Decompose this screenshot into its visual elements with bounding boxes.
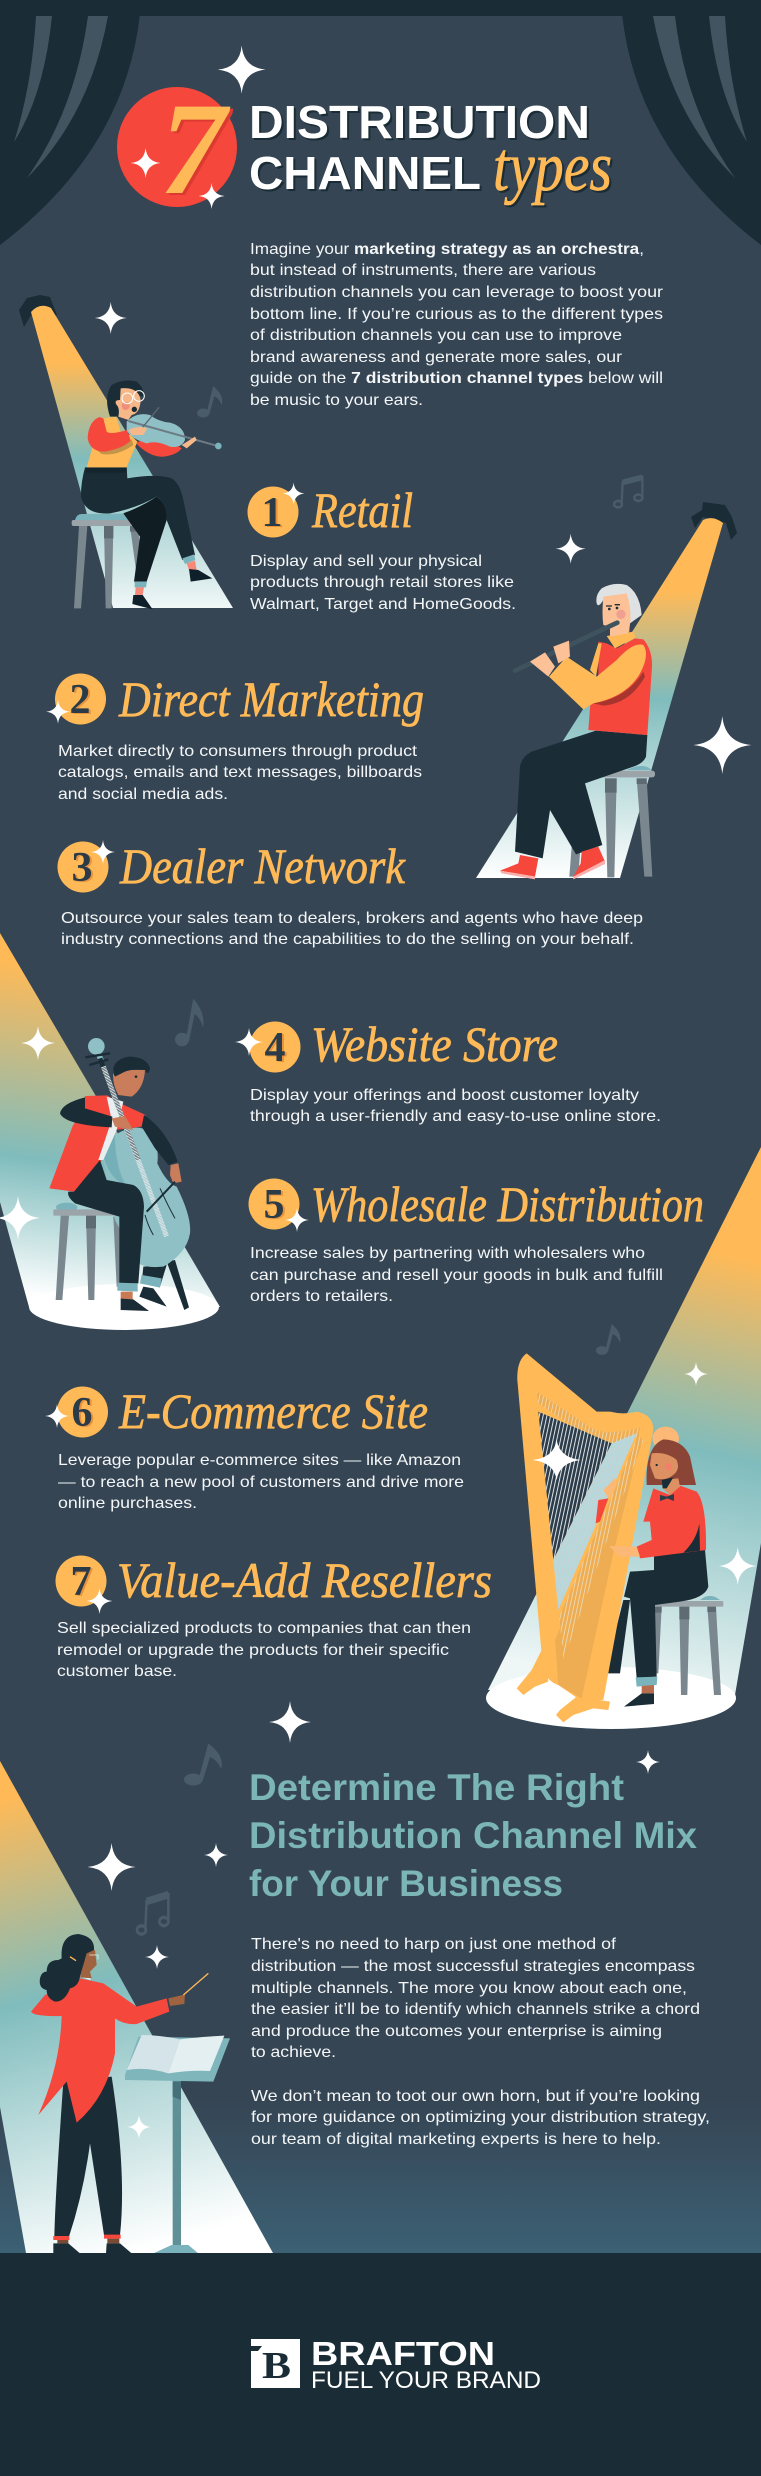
intro text: distribution channels you can leverage to boost your: [250, 284, 664, 301]
section 1: retail: products through retail stores like: [250, 574, 514, 591]
section 1: retail: Walmart, Target and HomeGoods.: [250, 596, 516, 613]
title: CHANNEL: [249, 147, 481, 199]
section 3: dealer network: industry connections and the capabilities to do the selling on your behalf.: [61, 931, 634, 948]
spotlight: conductor: [0, 1761, 273, 2253]
section 3: dealer network: [58, 838, 643, 948]
section 2: direct marketing: Direct Marketing: [118, 671, 424, 727]
spotlight: flutist: [476, 502, 737, 878]
section 1: retail: Retail: [311, 482, 413, 538]
section 7: value-add resellers: [56, 1552, 492, 1680]
intro text: [250, 241, 664, 409]
section 2: direct marketing: 2: [70, 677, 90, 723]
section 2: direct marketing: Market directly to consumers through product: [58, 743, 418, 760]
cellist stars: [0, 1026, 55, 1240]
section 5: wholesale distribution: 5: [264, 1182, 284, 1228]
title badge: red circle with 7: [117, 75, 237, 222]
section 2: direct marketing: and social media ads.: [58, 786, 228, 803]
closing text: [251, 1936, 710, 2148]
closing text: the easier it’ll be to identify which channels strike a chord: [251, 2001, 700, 2018]
conductor stars: [127, 1945, 169, 2139]
section 3: dealer network: Outsource your sales team to dealers, brokers and agents who have deep: [61, 910, 643, 927]
closing text: There's no need to harp on just one method of: [251, 1936, 617, 1953]
intro text: but instead of instruments, there are various: [250, 262, 596, 279]
closing text: for more guidance on optimizing your distribution strategy,: [251, 2109, 710, 2126]
section 6: e-commerce site: online purchases.: [58, 1495, 197, 1512]
spotlight: harpist: [486, 1147, 761, 1729]
heading: determine the right mix: for Your Business: [249, 1863, 563, 1904]
closing text: multiple channels. The more you know about each one,: [251, 1980, 687, 1997]
section 5: wholesale distribution: can purchase and resell your goods in bulk and fulfill: [250, 1267, 663, 1284]
title: types: [493, 129, 612, 206]
curtain: right: [622, 14, 761, 245]
section 4: website store: through a user-friendly and easy-to-use online store.: [250, 1108, 661, 1125]
section 7: value-add resellers: customer base.: [57, 1663, 177, 1680]
figure: violinist: [72, 381, 222, 609]
closing text: to achieve.: [251, 2044, 336, 2061]
section 6: e-commerce site: [45, 1383, 464, 1512]
brafton logo: BRAFTON: [311, 2335, 495, 2372]
section 1: retail: Display and sell your physical: [250, 553, 482, 570]
title badge: red circle with 7: 7: [160, 75, 231, 222]
heading: determine the right mix: Distribution Channel Mix: [249, 1815, 697, 1856]
section 6: e-commerce site: Leverage popular e-commerce sites — like Amazon: [58, 1452, 461, 1469]
section 4: website store: [235, 1016, 661, 1125]
closing text: and produce the outcomes your enterprise is aiming: [251, 2023, 662, 2040]
section 4: website store: 4: [264, 1025, 286, 1071]
brafton logo: FUEL YOUR BRAND: [311, 2367, 541, 2394]
section 6: e-commerce site: 6: [72, 1390, 92, 1436]
intro text: brand awareness and generate more sales, our: [250, 349, 623, 366]
spotlight: violinist: [19, 295, 233, 608]
section 5: wholesale distribution: orders to retailers.: [250, 1288, 393, 1305]
section 3: dealer network: 3: [72, 845, 92, 891]
footer band: [0, 2253, 761, 2476]
intro text: bottom line. If you’re curious as to the different types: [250, 306, 663, 323]
heading: determine the right mix: [249, 1767, 697, 1904]
section 6: e-commerce site: — to reach a new pool of customers and drive more: [58, 1474, 464, 1491]
section 1: retail: [248, 482, 516, 613]
title: [249, 96, 612, 206]
heading: determine the right mix: Determine The Right: [249, 1767, 624, 1808]
section 7: value-add resellers: Value-Add Resellers: [117, 1552, 492, 1608]
section 7: value-add resellers: remodel or upgrade the products for their specific: [57, 1642, 449, 1659]
figure: cellist: [49, 1038, 190, 1311]
closing text: distribution — the most successful strategies encompass: [251, 1958, 695, 1975]
section 2: direct marketing: [46, 671, 424, 803]
figure: flutist: [500, 584, 655, 879]
intro text: of distribution channels you can use to improve: [250, 327, 622, 344]
closing text: our team of digital marketing experts is here to help.: [251, 2131, 661, 2148]
intro text: be music to your ears.: [250, 392, 423, 409]
spotlight: cellist: [0, 933, 220, 1330]
lower stage glow: [0, 2100, 761, 2253]
section 3: dealer network: Dealer Network: [119, 838, 406, 894]
section 2: direct marketing: catalogs, emails and text messages, billboards: [58, 764, 422, 781]
intro text: Imagine your marketing strategy as an orchestra ,: [250, 241, 644, 258]
section 7: value-add resellers: 7: [70, 1559, 92, 1605]
section 4: website store: Display your offerings and boost customer loyalty: [250, 1087, 639, 1104]
title: DISTRIBUTION: [249, 96, 590, 148]
top curtain band: [0, 0, 761, 16]
brafton logo: [251, 2335, 541, 2394]
brafton logo: B: [262, 2345, 291, 2387]
figure: harpist: [517, 1353, 723, 1722]
curtain: left: [0, 14, 140, 245]
intro text: guide on the 7 distribution channel types below will: [250, 370, 663, 387]
decorative stars: [88, 46, 751, 1891]
section 1: retail: 1: [262, 490, 282, 536]
section 4: website store: Website Store: [311, 1016, 558, 1072]
harpist stars: [684, 1362, 757, 1585]
figure: conductor: [31, 1934, 230, 2253]
section 5: wholesale distribution: [248, 1176, 704, 1305]
music notes: [137, 386, 642, 1934]
section 6: e-commerce site: E-Commerce Site: [118, 1383, 428, 1439]
section 7: value-add resellers: Sell specialized products to companies that can then: [57, 1620, 471, 1637]
section 5: wholesale distribution: Increase sales by partnering with wholesalers who: [250, 1245, 645, 1262]
closing text: We don’t mean to toot our own horn, but if you’re looking: [251, 2088, 700, 2105]
